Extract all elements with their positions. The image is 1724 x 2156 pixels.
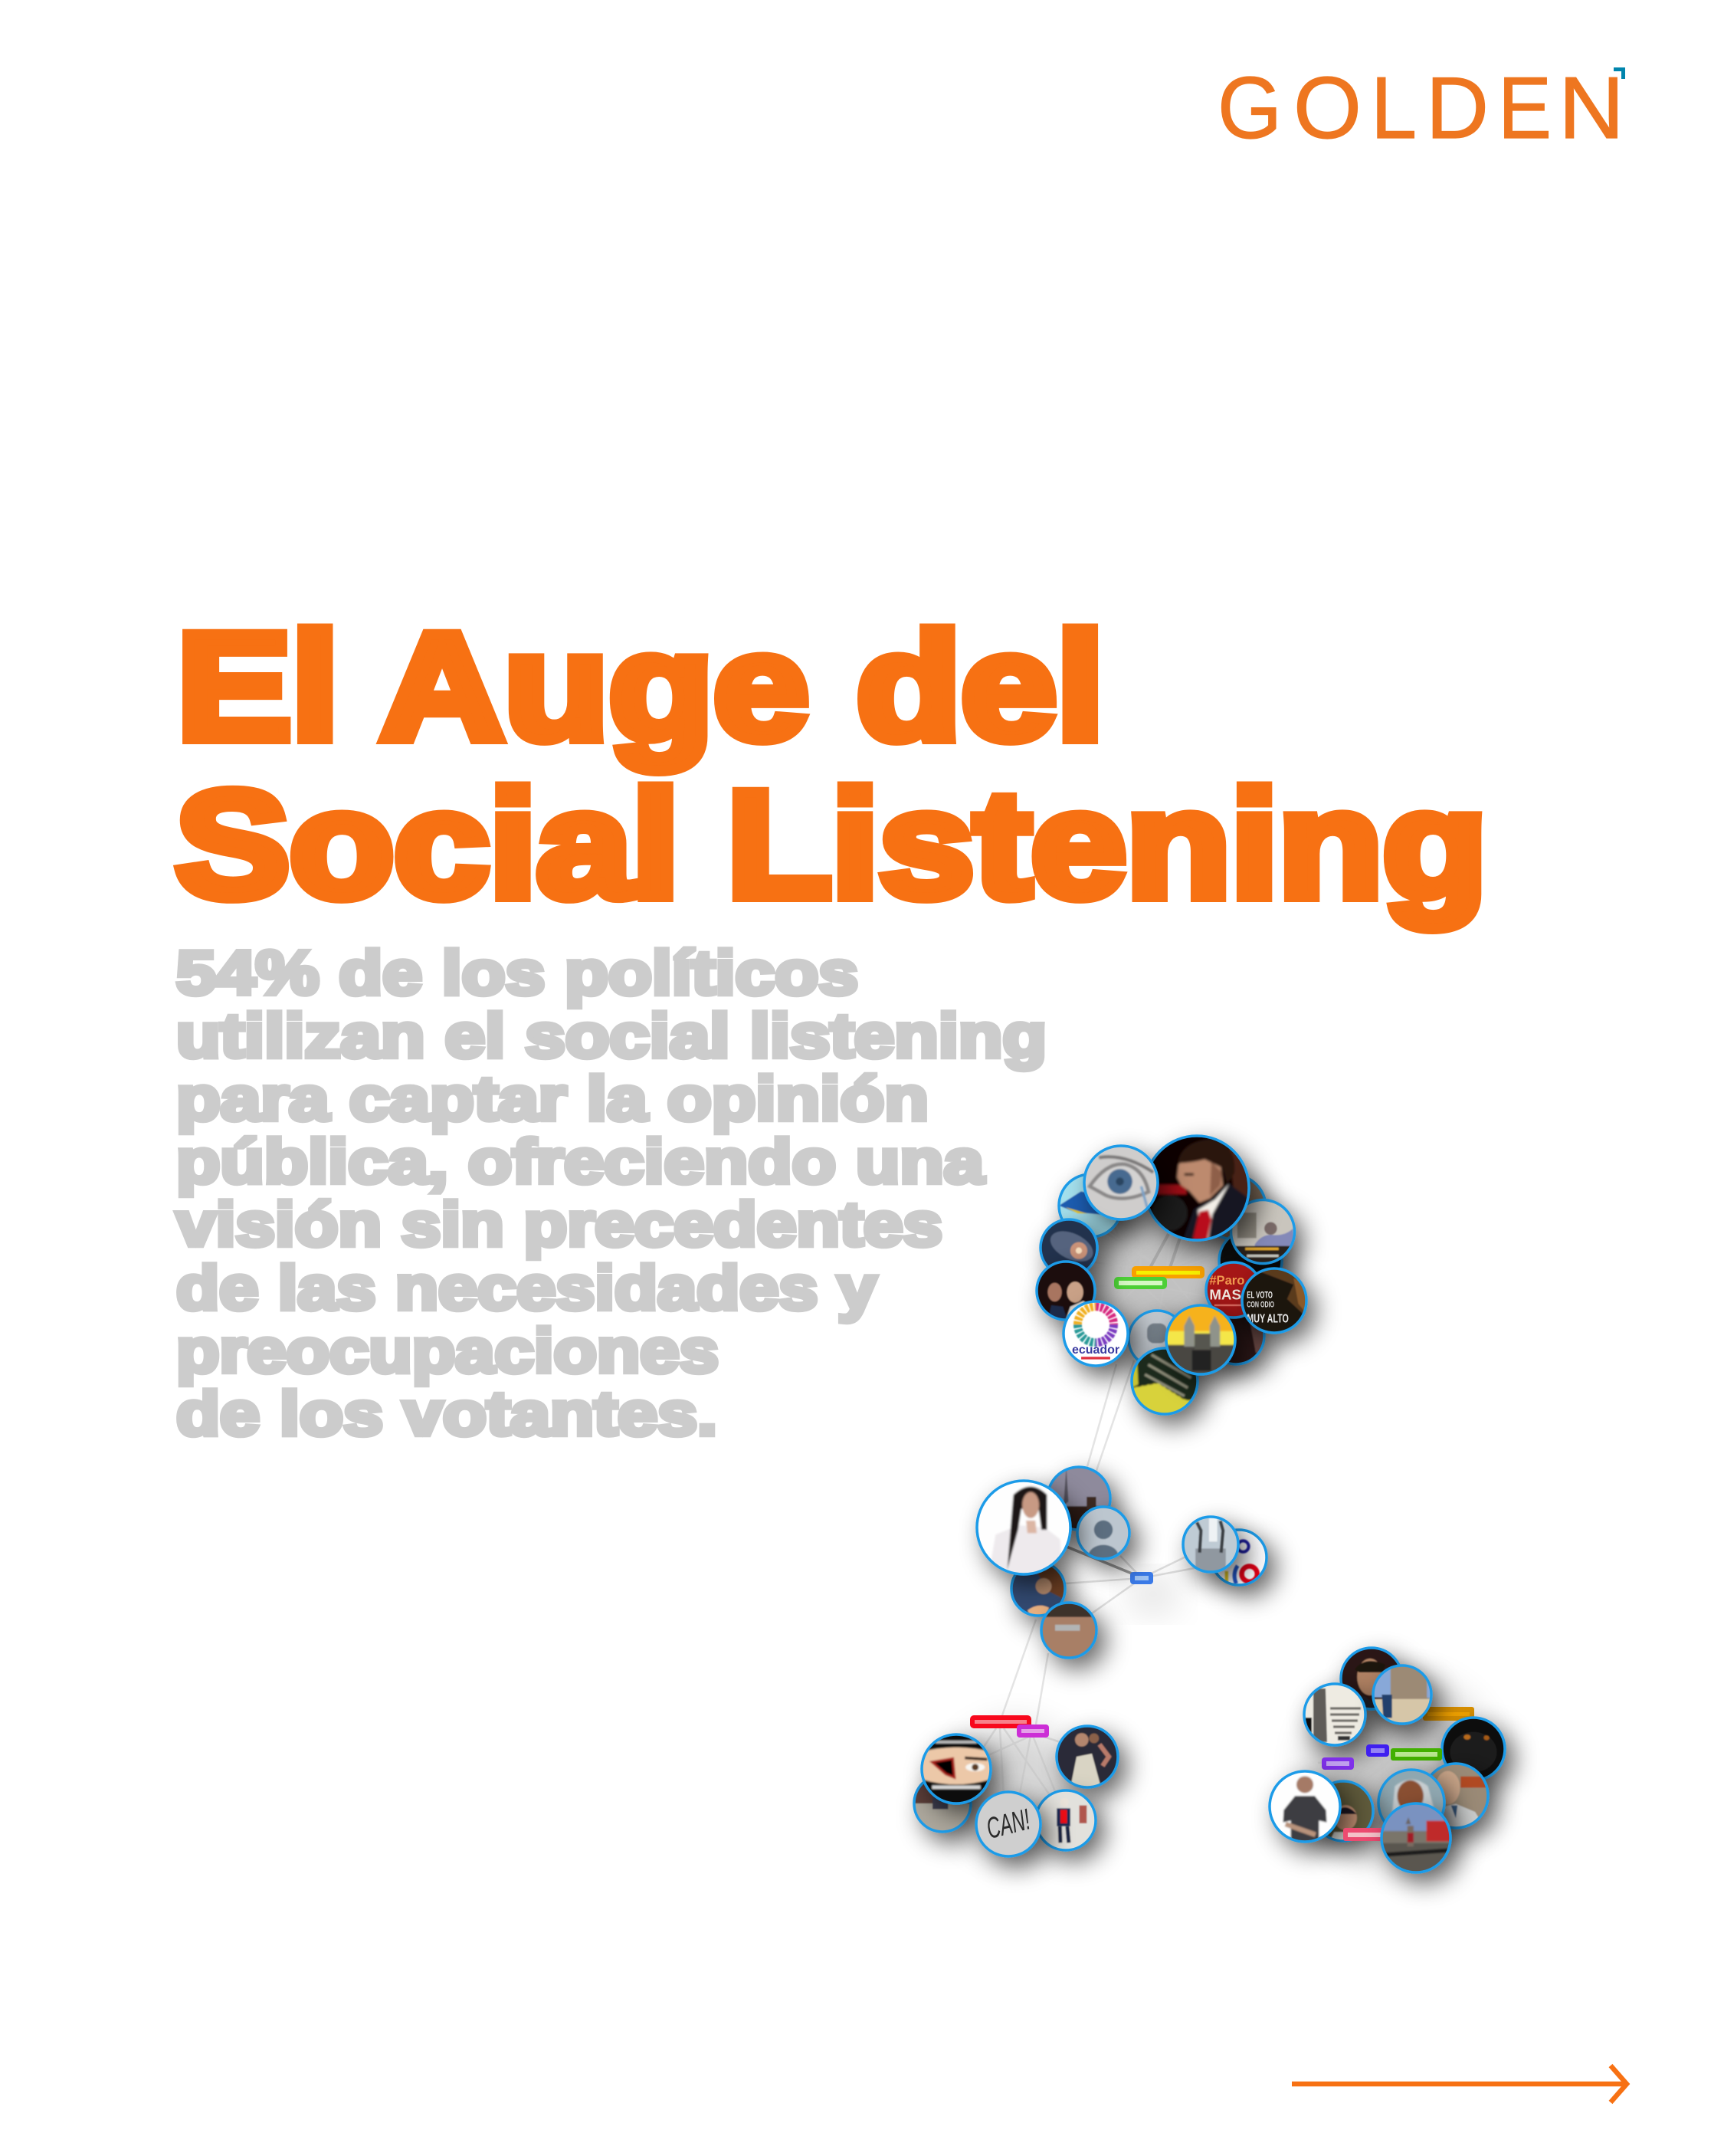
node: vintage poster	[1301, 1681, 1368, 1748]
node: palm statue	[1180, 1514, 1241, 1575]
subtitle text block: utilizan el social listening	[176, 1002, 1047, 1071]
subtitle text block: de las necesidades y	[176, 1254, 877, 1323]
subtitle text block: de los votantes.	[176, 1380, 717, 1449]
node: behind portrait	[1198, 1172, 1269, 1242]
node: street with bus	[1378, 1800, 1454, 1876]
title: Social Listening	[175, 760, 1487, 929]
link to man portrait	[1146, 1234, 1180, 1276]
bar: indigo label	[1366, 1744, 1389, 1757]
link to woman	[1067, 1547, 1136, 1575]
bar: pink label	[1343, 1828, 1385, 1841]
node: baby	[1008, 1559, 1068, 1619]
node: light blue	[1056, 1171, 1125, 1240]
bar: amber label	[1423, 1707, 1474, 1721]
node: eye	[1080, 1142, 1162, 1223]
node: woman vote poster	[1239, 1265, 1309, 1336]
subtitle text block	[176, 939, 1047, 1449]
logo: GOLDEN: N	[1558, 60, 1624, 157]
bar: red label	[970, 1715, 1031, 1728]
logo: GOLDEN	[1218, 60, 1624, 157]
bar: blue label	[1130, 1572, 1153, 1584]
cluster halo	[1079, 1194, 1266, 1381]
subtitle text block: preocupaciones	[176, 1317, 719, 1386]
node: man outdoors	[1310, 1778, 1376, 1844]
node: person in veil	[1375, 1767, 1447, 1839]
bar: purple label	[1322, 1757, 1354, 1770]
subtitle text block: pública, ofreciendo una	[176, 1127, 985, 1196]
bar: orange label	[1132, 1266, 1205, 1278]
node: older man	[1421, 1761, 1491, 1831]
network cluster: middle	[972, 1464, 1270, 1661]
node: ecuador logo	[1060, 1298, 1131, 1369]
title: El Auge del	[177, 602, 1104, 771]
cluster links	[981, 1728, 1065, 1797]
network cluster: bottom left	[911, 1715, 1121, 1859]
node: bride	[1054, 1723, 1121, 1790]
node: man red shirt	[1033, 1787, 1099, 1853]
node: red poster: #Paro	[1209, 1273, 1244, 1288]
node: woman vote poster: MUY ALTO	[1247, 1313, 1289, 1326]
node: galaxy	[1037, 1216, 1100, 1279]
node: red poster: MASA	[1209, 1287, 1252, 1303]
title	[175, 602, 1487, 929]
logo: GOLDEN: G	[1218, 60, 1282, 157]
cluster halo	[950, 1724, 1080, 1855]
node: woman vote poster: EL VOTO	[1247, 1291, 1273, 1301]
node: woman vote poster: CON ODIO	[1247, 1300, 1274, 1309]
node: floor	[1038, 1600, 1100, 1661]
node: CAN! sticker: CAN!	[983, 1803, 1034, 1846]
node: grey profile	[1075, 1505, 1132, 1568]
bar: magenta label	[1017, 1724, 1049, 1738]
network cluster: top	[1034, 1131, 1309, 1417]
node: logo behind	[1208, 1527, 1270, 1588]
node: grey profile	[1126, 1308, 1188, 1370]
arrow: next page	[1292, 2066, 1627, 2102]
node: castle	[1370, 1662, 1434, 1727]
node: dark behind poster	[1216, 1226, 1285, 1295]
subtitle text block: para captar la opinión	[176, 1065, 929, 1134]
node: man dark hair	[1338, 1645, 1405, 1712]
node: yellow book	[1129, 1345, 1201, 1417]
node: orange-eyed cat	[1439, 1715, 1508, 1784]
cluster links	[1065, 1552, 1211, 1613]
bar: green label	[1391, 1748, 1442, 1761]
node: ecuador logo: ecuador	[1072, 1344, 1119, 1357]
logo: GOLDEN: D	[1426, 60, 1489, 157]
logo: GOLDEN: O	[1293, 60, 1362, 157]
soft shadow of blue label	[1129, 1577, 1178, 1611]
node: man in suit	[1139, 1131, 1254, 1245]
subtitle text block: visión sin precedentes	[176, 1190, 942, 1259]
bar: green label	[1114, 1277, 1167, 1289]
logo: GOLDEN: E	[1498, 60, 1552, 157]
node: man in grey scrubs	[1266, 1767, 1344, 1846]
node: group street	[911, 1772, 974, 1835]
network cluster: bottom right	[1266, 1645, 1508, 1876]
node: eiffel tower	[1044, 1464, 1113, 1533]
cluster halo	[1308, 1680, 1489, 1861]
inter-cluster links	[1002, 1360, 1134, 1724]
node: woman in white	[972, 1476, 1075, 1579]
node: dark circle	[1205, 1304, 1267, 1367]
subtitle text block: 54% de los políticos	[176, 939, 858, 1008]
node: couple photo	[1034, 1258, 1098, 1323]
cluster links	[1057, 1211, 1257, 1334]
node: poster woman	[1227, 1196, 1298, 1267]
node: red poster	[1203, 1259, 1264, 1321]
logo: GOLDEN: L	[1371, 60, 1417, 157]
node: CAN! sticker	[973, 1789, 1044, 1859]
node: church	[1163, 1301, 1238, 1380]
cluster links	[1318, 1721, 1456, 1824]
node: mask cartoon	[918, 1731, 995, 1807]
